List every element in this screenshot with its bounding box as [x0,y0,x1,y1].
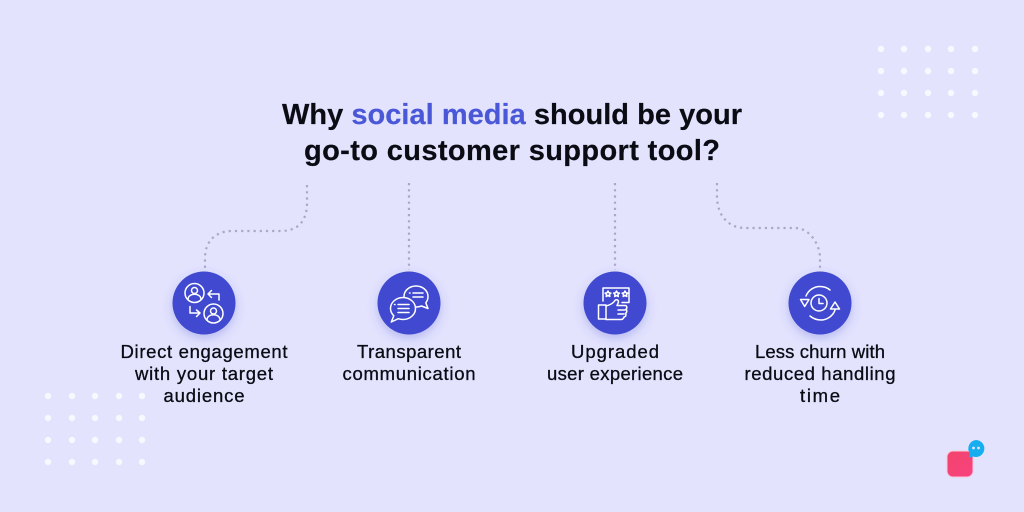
label: audience [164,385,244,406]
title [282,99,742,167]
icon: users exchanging [172,272,236,334]
icon: clock with cycle arrows [788,272,852,334]
logo: pink square [947,451,973,477]
title: Why social media should be your [282,99,742,131]
label: Upgraded [571,341,659,362]
item: upgraded user experience [547,272,683,384]
item: direct engagement [120,272,288,406]
label: Transparent [357,341,461,362]
label: Direct engagement [120,341,288,362]
connector: third item [614,183,616,270]
label [744,341,896,406]
connector: second item [408,183,410,270]
item: less churn [744,272,896,406]
connector: first item [205,185,307,270]
label: reduced handling [744,363,896,384]
icon: speech bubbles [378,272,440,334]
label: communication [342,363,476,384]
logo: blue chat bubble [968,440,984,458]
decorative dot grid: bottom left [45,393,145,465]
label [120,341,288,406]
label: with your target [134,363,273,384]
label: Less churn with [755,341,885,362]
logo [947,440,984,477]
label [547,341,683,384]
label: time [800,385,840,406]
icon: thumbs up with star rating [584,272,646,334]
label: user experience [547,363,683,384]
item: transparent communication [342,272,476,384]
connector: fourth item [717,183,820,270]
label [342,341,476,384]
decorative dot grid: top right [878,46,978,118]
title: go-to customer support tool? [304,135,720,167]
